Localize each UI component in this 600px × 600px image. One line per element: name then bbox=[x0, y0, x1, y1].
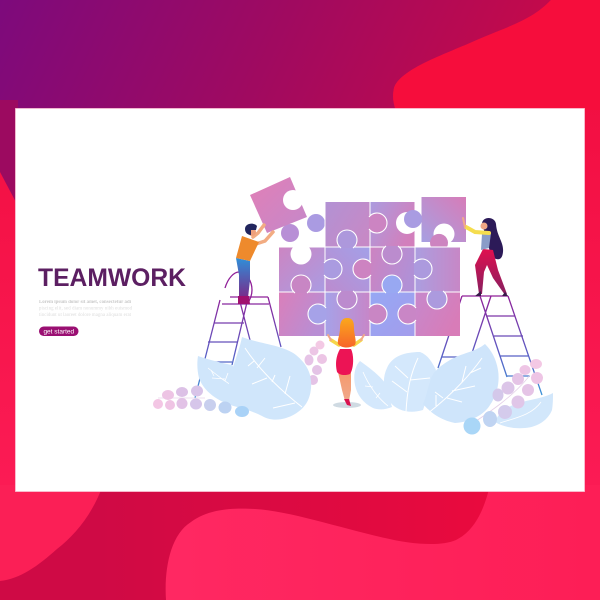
woman: dress bbox=[336, 349, 353, 375]
man: head bbox=[245, 224, 257, 236]
woman: hands bbox=[328, 335, 364, 340]
leaf: large bbox=[423, 344, 499, 423]
person: woman on right ladder bbox=[463, 218, 508, 296]
top right red shape bbox=[393, 0, 600, 110]
puzzle: middle row tiles bbox=[279, 244, 460, 292]
text block: lorem ipsum: piscing elit, sed diam nonummy nibh euismod bbox=[39, 306, 133, 312]
woman: legs bbox=[338, 372, 351, 401]
bottom centre blob bbox=[166, 485, 600, 600]
man: arms bbox=[253, 225, 273, 244]
text block: lorem ipsum: Lorem ipsum dolor sit amet, consectetur adi bbox=[39, 300, 132, 305]
woman: torso bbox=[481, 233, 491, 250]
leaf: small left bbox=[197, 356, 255, 408]
arc: rope loop bbox=[225, 272, 252, 304]
text block: lorem ipsum: tincidunt ut laoreet dolore magna aliquam erat bbox=[39, 313, 132, 318]
berries: upper left sprig bbox=[304, 340, 327, 385]
puzzle: rotated piece bbox=[250, 177, 307, 242]
woman: shoe bbox=[344, 399, 351, 406]
man: shoes bbox=[238, 296, 250, 304]
puzzle: bottom row tiles bbox=[279, 292, 460, 336]
leaves: left cluster bbox=[197, 337, 311, 420]
text block: lorem ipsum bbox=[39, 300, 133, 318]
leaf: middle bbox=[384, 352, 436, 412]
top purple-red wave bbox=[0, 0, 551, 125]
puzzle: seams bbox=[279, 202, 460, 336]
man: shirt bbox=[236, 236, 259, 261]
puzzle: knob left bbox=[307, 214, 325, 232]
woman: legs bbox=[475, 249, 507, 295]
berries: bottom left sprig bbox=[153, 386, 249, 417]
button: get started bbox=[39, 326, 78, 336]
puzzle: knobs bbox=[291, 213, 447, 324]
berries: right sprig bbox=[464, 359, 543, 434]
leaf: far left bbox=[354, 361, 392, 409]
title: TEAMWORK bbox=[38, 264, 186, 292]
leaves: right cluster bbox=[354, 344, 553, 428]
woman: arms bbox=[331, 340, 361, 345]
puzzle bbox=[250, 177, 466, 336]
leaf: large left bbox=[228, 337, 311, 420]
puzzle: top row tiles bbox=[324, 202, 418, 247]
woman: shadow bbox=[333, 402, 361, 408]
ladder: left bbox=[195, 272, 281, 398]
ladder: right bbox=[438, 296, 542, 395]
woman: hand bbox=[463, 218, 465, 227]
left purple strip bbox=[0, 100, 18, 206]
person: man on ladder bbox=[236, 224, 273, 304]
woman: arm bbox=[466, 227, 489, 233]
woman: hair bbox=[338, 318, 356, 348]
man: legs bbox=[236, 258, 250, 298]
button: get started: get started bbox=[43, 328, 75, 336]
woman: hair bbox=[482, 218, 503, 259]
panel: white card bbox=[16, 108, 584, 492]
leaf: bottom right bbox=[495, 393, 553, 428]
person: woman in front bbox=[328, 318, 364, 408]
bottom dark band bbox=[0, 485, 500, 600]
woman: face bbox=[480, 222, 488, 230]
bottom left blob bbox=[0, 485, 103, 581]
puzzle: top right piece bbox=[404, 197, 466, 248]
woman: shoes bbox=[475, 291, 508, 296]
